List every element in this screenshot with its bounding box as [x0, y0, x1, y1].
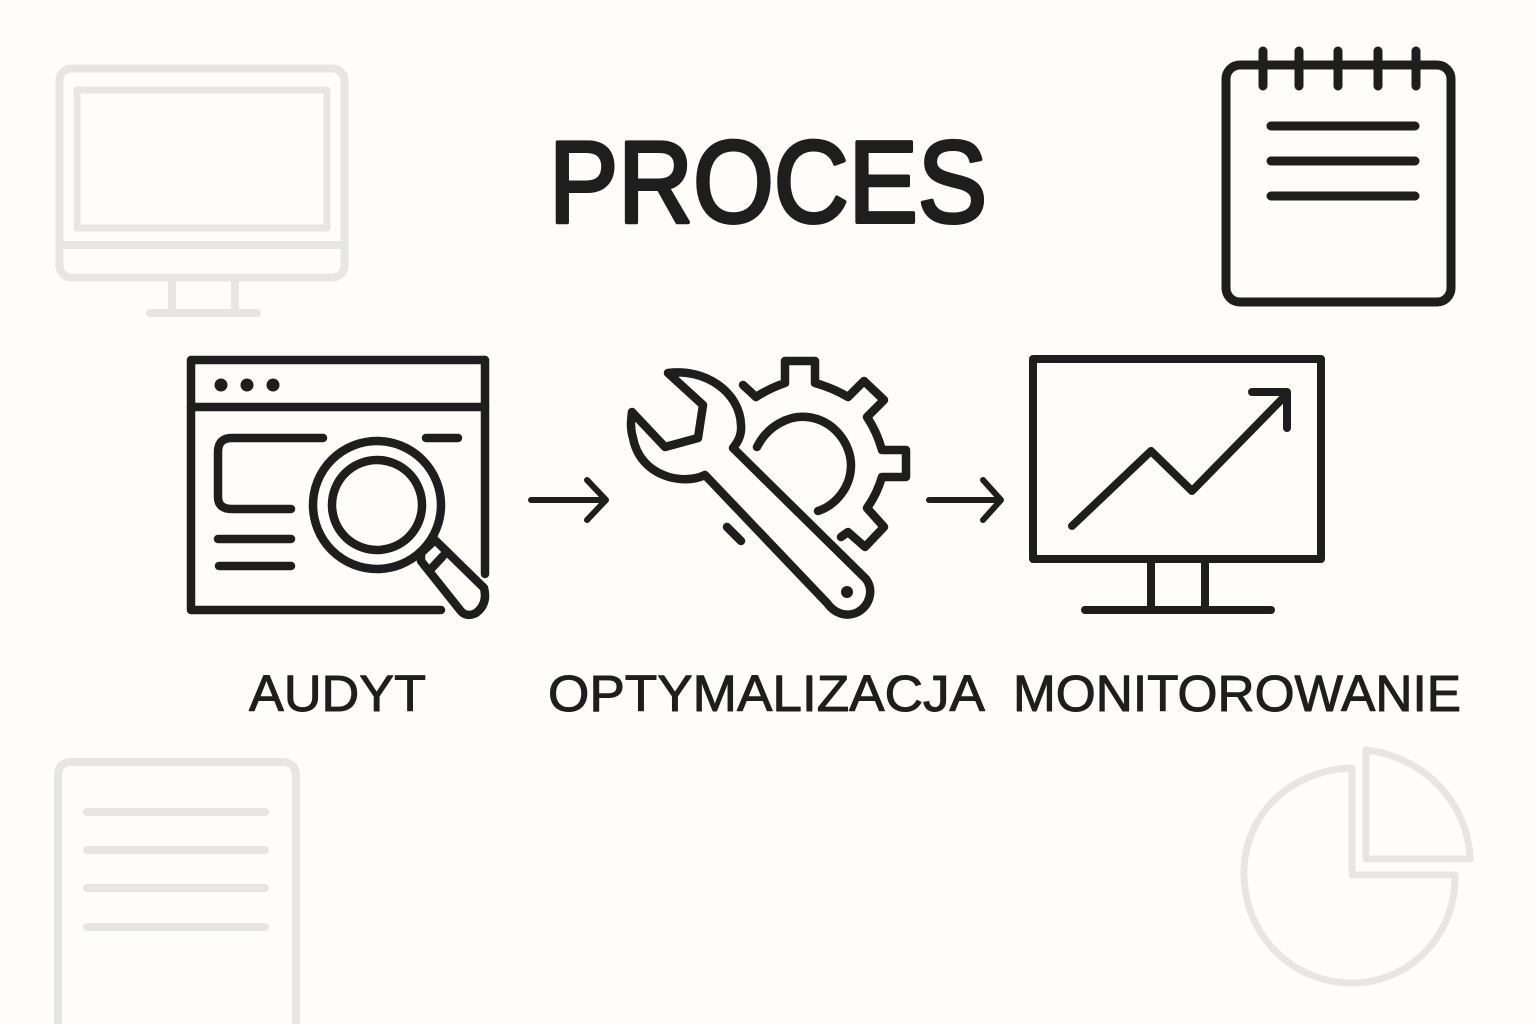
label: monitoring: MONITOROWANIE — [1013, 665, 1461, 722]
icon: website audit with magnifying glass — [191, 360, 485, 615]
label: optimisation: OPTYMALIZACJA — [548, 665, 985, 722]
title: PROCES — [549, 117, 987, 247]
arrow: audit to optimisation — [531, 480, 606, 520]
icon: wrench and gear — [631, 361, 906, 615]
icon: faint document — [58, 762, 296, 1024]
icon: monitor with rising chart — [1033, 359, 1321, 610]
icon: notepad — [1226, 51, 1451, 302]
label: audit: AUDYT — [249, 665, 426, 722]
arrow: optimisation to monitoring — [929, 480, 1001, 520]
icon: faint desktop monitor — [60, 68, 344, 313]
icon: faint pie chart — [1244, 750, 1470, 983]
